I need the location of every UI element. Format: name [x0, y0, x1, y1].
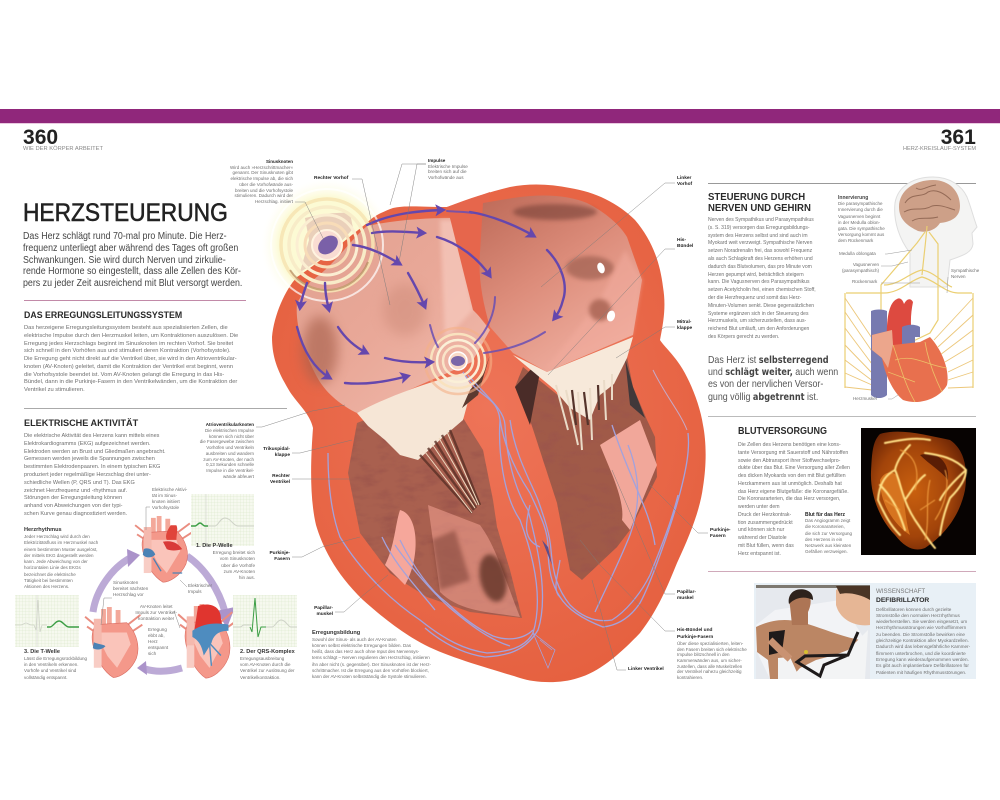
text: Blut für das Herz: Das Angiogramm zeigt: [805, 518, 850, 523]
text: His-Bündel und Purkinje-Fasern: den Fasern breiten sich elektrische: [677, 647, 747, 652]
label: Linker Vorhof: [677, 176, 692, 187]
body text: Herzmuskels, um sicherzustellen, dass aus-: [708, 318, 806, 324]
heart: QRS: [178, 604, 234, 678]
AV node: [451, 356, 465, 366]
text: T-Welle: Vorhöfe und Ventrikel sind: [24, 668, 76, 673]
label: Rechter Ventrikel: Ventrikel: [270, 480, 290, 485]
pull quote: und schlägt weiter, auch wenn: [708, 367, 838, 378]
text: Herzrhythmus: [24, 527, 98, 589]
body text: tante Versorgung mit Sauerstoff und Nährstoffen: [738, 450, 848, 456]
body text: schen Kurve genau diagnostiziert werden.: [24, 511, 127, 517]
heading: STEUERUNG DURCH: [708, 192, 805, 203]
body text: tion zusammengedrückt: [738, 520, 793, 526]
intro text: frequenz unterliegt aber während des Tages oft großen: [23, 243, 238, 254]
EKG 2: QRS complex: [233, 595, 297, 647]
body text: während der Diastole: [738, 535, 787, 541]
body text: [708, 217, 816, 340]
text: His-Bündel und Purkinje-Fasern: His-Bündel und: [677, 628, 712, 633]
text: Blut für das Herz: Netzwerk aus kleinsten: [805, 543, 851, 548]
text: Blut für das Herz: [805, 512, 852, 555]
pull quote: gung völlig abgetrennt ist.: [708, 392, 818, 403]
annotation: Elektrische Aktivität: Elektrische Aktivi-: [152, 487, 187, 492]
label: Sinusknoten: [230, 159, 293, 204]
text: Blut für das Herz: Gefäßen verzweigen.: [805, 549, 848, 554]
label: Medulla oblongata: Medulla oblongata: [839, 251, 876, 256]
label: Sinusknoten: über die Vorhofwände aus-: [239, 182, 293, 187]
label: Wissenschaft: WISSENSCHAFT: [876, 588, 925, 595]
text: Innervierung: dem Rückenmark: [838, 238, 873, 243]
body text: als auch Schlagkraft des Herzens erhöhen und: [708, 256, 813, 262]
label: Purkinje-Fasern right: Purkinje-: [710, 528, 731, 533]
head silhouette: [895, 177, 977, 287]
SA node: [314, 232, 342, 258]
text: T-Welle: Lässt die Erregungsrückbildung: [24, 656, 87, 661]
body text: und können sich nur: [738, 527, 784, 533]
body text: wiederherstellen. Sie werden eingesetzt, um: [876, 619, 967, 624]
body text: sich schnell in den Vorhöfen aus und stimuliert deren Kontraktion (Vorhofsystole).: [24, 348, 231, 354]
text: Blut für das Herz: die sich zur Versorgung: [805, 531, 852, 536]
body text: Herzkammern aus ist unmöglich. Deshalb hat: [738, 481, 842, 487]
section: Steuerung durch Nerven und Gehirn: [708, 192, 816, 340]
body text: reichend Blut umläuft, um den Anforderungen: [708, 326, 809, 332]
leaders: [881, 250, 948, 399]
annotation: Elektrischer Impuls: Impuls: [188, 589, 202, 594]
cycle diagram: [15, 494, 297, 678]
body text: Es gibt auch implantierbare Defibrillatoren für: [876, 663, 969, 668]
pull quote: es von der nervlichen Versor-: [708, 379, 823, 390]
left ventricle cavity: [515, 357, 657, 580]
label: Atrioventrikularknoten: 0,13 Sekunden schnelle: [206, 462, 254, 467]
body text: flimmern unterbrochen, und die koordinierte: [876, 651, 966, 656]
page number left: 360: [23, 125, 58, 149]
label: Sinusknoten: stimulieren. Dadurch wird der: [234, 193, 293, 198]
body text: zeichnet Herzfrequenz und -rhythmus auf.: [24, 488, 127, 494]
heading: [708, 192, 811, 214]
body text: mit Blut füllen, wenn das: [738, 543, 794, 549]
body text: des dicken Myokards von den mit Blut gefüllten: [738, 473, 846, 479]
text: Erregungsbildung: kann der AV-Knoten selbstständig die Systole stimulieren.: [312, 674, 427, 679]
annotation: AV-Knoten: AV-Knoten leitet: [140, 604, 172, 609]
text: Innervierung: Die parasympathische: [838, 201, 883, 206]
label: Mitralklappe: klappe: [677, 326, 692, 331]
body text: Nerven des Sympathikus und Parasympathikus: [708, 217, 814, 223]
label: Sinusknoten: Wird auch »Herzschrittmacher«: [230, 165, 293, 170]
heading: NERVEN UND GEHIRN: [708, 203, 811, 214]
text: Innervierung: in der Medulla oblon-: [838, 220, 880, 225]
label: His-Bündel: His-: [677, 238, 686, 243]
annotation: Elektrische Aktivität: knoten initiiert: [152, 499, 180, 504]
label: Impulse: Vorhofwände aus: [428, 175, 464, 180]
label: Trikuspidalklappe: Trikuspidal-: [263, 447, 290, 452]
page number right: [903, 125, 976, 152]
label: Purkinje-Fasern left: Purkinje-: [269, 551, 290, 556]
page number left: WIE DER KÖRPER ARBEITET: [23, 146, 103, 152]
text: Innervierung: gata. Die sympathische: [838, 226, 885, 231]
text: His-Bündel und Purkinje-Fasern: zustellen, dass alle Muskelzellen: [677, 664, 742, 669]
body text: Erregung kann wiederaufgenommen werden.: [876, 657, 969, 662]
text: QRS: Ventrikel zur Auslösung der: [240, 668, 295, 673]
body text: Defibrillatoren können durch gezielte: [876, 606, 951, 612]
body text: schiedliche Wellen (P, QRS und T). Das EKG: [24, 480, 135, 486]
text: T-Welle: vollständig entspannt.: [24, 675, 68, 680]
label: Rechter Ventrikel: [270, 474, 290, 485]
impulse arrows: [297, 210, 565, 384]
body text: Herzen gepumpt wird, beträchtlich steigern: [708, 272, 804, 278]
label: Linker Vorhof: Vorhof: [677, 182, 692, 187]
annotation: Sinusknoten: bereitet nächsten: [113, 586, 148, 591]
text: P-Welle: [213, 550, 255, 580]
text: Innervierung: Innervierung: [838, 195, 868, 201]
pull quote: [708, 355, 838, 403]
heading: Defibrillator: DEFIBRILLATOR: [876, 597, 929, 604]
text: His-Bündel und Purkinje-Fasern: [677, 628, 747, 680]
text: QRS: Ventrikelkontraktion.: [240, 675, 281, 680]
body text: zu beenden. Die Stromstöße bewirken eine: [876, 632, 965, 637]
annotation: AV-Knoten: Impuls zur Ventrikel-: [135, 610, 177, 615]
text: Herzrhythmus: der mittels EKG dargestellt werden: [24, 553, 94, 558]
right ventricle cavity: [348, 408, 522, 618]
text: Blut für das Herz: die Koronararterien,: [805, 524, 845, 529]
body text: Ventrikel zu stimulieren.: [24, 387, 85, 393]
label: Papillarmuskel right: [677, 590, 696, 601]
body text: elektrische Impulse durch den Herzmuskel leiten, um Kontraktionen auszulösen. Die: [24, 333, 238, 339]
body text: Systeme ergänzen sich in der Steuerung des: [708, 311, 808, 317]
main title: HERZSTEUERUNG: [23, 199, 228, 227]
label: Atrioventrikularknoten: die Fasergewebe zwischen: [200, 439, 254, 444]
nerves: [845, 226, 973, 388]
text: Herzrhythmus: Elektrizitätsfluss im Herzmuskel nach: [24, 540, 98, 545]
text: T-Welle: [24, 656, 87, 680]
EKG 3: T wave: [15, 595, 79, 647]
text: Erregungsbildung: heißt, dass das Herz auch ohne Input des Nervensys-: [312, 649, 419, 654]
text: Erregungsbildung: ihn aber nicht (s. gegenüber). Der Sinusknoten ist der Herz-: [312, 662, 431, 667]
text: Herzrhythmus: horizontalen Linie des EKGs: [24, 565, 81, 570]
text: Erregungsbildung: Erregungsbildung: [312, 630, 360, 636]
SA node rings: [271, 189, 383, 301]
label: Purkinje-Fasern left: [269, 550, 290, 562]
body text: Elektrokardiogramms (EKG) aufgezeichnet werden.: [24, 441, 150, 447]
annotation: Sinusknoten: Sinusknoten: [113, 580, 138, 585]
heart: T wave: [85, 607, 142, 678]
tricuspid valve: [357, 355, 490, 513]
annotation: Erregung ebbt: sich: [148, 651, 156, 656]
body text: Patienten mit häufigen Rhythmusstörungen.: [876, 670, 966, 675]
label: Papillarmuskel left: [314, 606, 333, 617]
label: Rechter Ventrikel: Rechter: [272, 474, 290, 479]
body text: dadurch das Blutvolumen, das pro Minute vom: [708, 264, 812, 270]
annotation: Erregung ebbt: ebbt ab,: [148, 633, 165, 638]
body text: Die Erregung geht nicht direkt auf die Ventrikel über, sie wird in den Atrioventrikular-: [24, 356, 237, 362]
label: Linker Vorhof: Linker: [677, 176, 691, 181]
label: Papillarmuskel left: Papillar-: [314, 606, 333, 611]
intro text: [23, 231, 242, 289]
aortic wall between atria: [447, 192, 490, 327]
annotation: Elektrischer Impuls: Elektrischer: [188, 583, 212, 588]
label: Vagusnerven: (parasympathisch): [842, 268, 879, 273]
body text: (s. S. 319) versorgen das Erregungsbildungs-: [708, 225, 810, 231]
annotation: Erregung ebbt: entspannt: [148, 645, 168, 650]
section: Erregungsleitungssystem: [24, 310, 238, 393]
page number right: HERZ-KREISLAUF-SYSTEM: [903, 146, 976, 152]
page number right: 361: [941, 125, 976, 149]
label: Atrioventrikularknoten: Impulse in die Ventrikel-: [206, 468, 254, 473]
heading: BLUTVERSORGUNG: [738, 426, 827, 437]
text: Innervierung: Vagusnerven beginnt: [838, 214, 880, 219]
panel: Defibrillator: [754, 583, 976, 679]
text: QRS: vom AV-Knoten durch die: [240, 662, 290, 667]
label: Mitralklappe: [677, 320, 692, 331]
label: Sinusknoten: genannt. Der Sinusknoten gibt: [232, 170, 293, 175]
body text: des Körpers gerecht zu werden.: [708, 334, 779, 340]
annotation: Sinusknoten: Herzschlag vor: [113, 592, 144, 597]
intro text: pers zu jeder Zeit ausreichend mit Blut versorgt werden.: [23, 278, 242, 289]
intro text: rende Hormone so eingestellt, dass alle Zellen des Kör-: [23, 266, 241, 277]
section: Elektrische Aktivität: [24, 418, 166, 517]
label: Sympathische Nerven: Nerven: [951, 274, 966, 279]
intro text: Das Herz schlägt rund 70-mal pro Minute. Die Herz-: [23, 231, 227, 242]
label: Vagusnerven: [842, 262, 879, 273]
label: Atrioventrikularknoten: wände abfeuert: [223, 474, 254, 479]
heart wall: [272, 184, 706, 682]
label: Purkinje-Fasern right: [710, 528, 731, 539]
body text: der die Herzfrequenz und somit das Herz-: [708, 295, 801, 301]
EKG 1: P wave: [191, 494, 254, 546]
label: Atrioventrikularknoten: ausbreiten und wandern: [206, 451, 254, 456]
label: Mitralklappe: Mitral-: [677, 320, 691, 325]
body text: Gemessen werden jeweils die Spannungen zwischen: [24, 456, 155, 462]
body text: Die Zellen des Herzens benötigen eine kons-: [738, 442, 841, 448]
label: Papillarmuskel right: muskel: [677, 596, 694, 601]
cycle arrows: [93, 556, 225, 671]
text: Blut für das Herz: Blut für das Herz: [805, 512, 845, 518]
main heart illustration: [268, 184, 706, 682]
body text: produziert jeder regelmäßige Herzschlag drei unter-: [24, 472, 151, 478]
header bar: [0, 109, 1000, 124]
text: His-Bündel und Purkinje-Fasern: Impulse blitzschnell in den: [677, 652, 730, 657]
body text: Erregung jedes Herzschlags beginnt im Sinusknoten im rechten Vorhof. Sie breitet: [24, 340, 233, 346]
text: Herzrhythmus: Tätigkeit bei bestimmten: [24, 578, 73, 583]
right atrium flap: [300, 213, 353, 272]
label: Rechter Vorhof: Rechter Vorhof: [314, 176, 348, 181]
section: Blutversorgung: [738, 426, 858, 556]
leader lines: [101, 507, 187, 628]
text: Erregungsbildung: tems schlägt – Nerven regulieren den Herzschlag, initiieren: [312, 655, 430, 660]
body text: [738, 442, 850, 558]
body text: werden unter dem: [738, 504, 779, 510]
body text: setzen Acetylcholin frei, einen chemischen Stoff,: [708, 287, 816, 293]
body text: bestimmten Elektrodenpaaren. In einem typischen EKG: [24, 464, 160, 470]
label: Sympathische Nerven: [951, 268, 979, 280]
text: His-Bündel und Purkinje-Fasern: Kammerwänden aus, um sicher-: [677, 658, 742, 663]
body text: Störungen der Erregungsleitung können: [24, 495, 122, 501]
annotation: Erregung ebbt: [148, 627, 168, 656]
body text: kann. Die Vagusnerven des Parasympathikus: [708, 279, 809, 285]
text: Innervierung: Versorgung kommt aus: [838, 232, 884, 237]
annotation: Sinusknoten: [113, 580, 148, 597]
label: Sinusknoten: Herzschlag. initiiert: [255, 199, 293, 204]
text: Innervierung: Innervierung durch die: [838, 207, 883, 212]
text: QRS: [240, 656, 295, 680]
pull quote: Das Herz ist selbsterregend: [708, 355, 829, 366]
brain: [899, 180, 960, 232]
label: Papillarmuskel right: Papillar-: [677, 590, 696, 595]
left atrium chamber: [479, 196, 642, 372]
text: Herzrhythmus: kann. Jede Abweichung von der: [24, 559, 88, 564]
AV node rings: [425, 328, 491, 394]
body text: system des Herzens selbst und sind auch im: [708, 233, 808, 239]
body text: Herz entspannt ist.: [738, 550, 781, 556]
label: Herzmuskel: Herzmuskel: [853, 396, 877, 401]
body text: [876, 606, 970, 676]
text: P-Welle: hin aus.: [239, 575, 255, 580]
text: His-Bündel und Purkinje-Fasern: Purkinje-Fasern: [677, 635, 713, 640]
body text: setzen Noradrenalin frei, das sowohl Frequenz: [708, 248, 812, 254]
annotation: Elektrische Aktivität: [152, 487, 188, 510]
body text: dukte über das Blut. Eine Versorgung aller Zellen: [738, 465, 850, 471]
label: Atrioventrikularknoten: können sich nicht über: [209, 434, 254, 438]
body text: Herzrhythmusstörungen wie Vorhofflimmern: [876, 625, 966, 630]
small heart: [871, 298, 948, 402]
label: Purkinje-Fasern left: Fasern: [274, 557, 290, 562]
body text: Druck der Herzkontrak-: [738, 512, 791, 518]
text: Herzrhythmus: bezeichnet die elektrische: [24, 572, 76, 577]
text: Erregungsbildung: Sowohl der Sinus- als auch der AV-Knoten: [312, 636, 396, 642]
annotation: AV-Knoten: kontraktion weiter: [138, 616, 174, 621]
label: Sinusknoten: elektrische Impulse ab, die sich: [230, 176, 293, 181]
text: P-Welle: über die Vorhöfe: [221, 563, 255, 568]
label: QRS: 2. Der QRS-Komplex: [240, 649, 295, 655]
text: P-Welle: zum AV-Knoten: [224, 569, 255, 574]
label: T-Welle: 3. Die T-Welle: [24, 649, 60, 655]
label: Impulse: breiten sich auf die: [428, 169, 467, 174]
label: Rückenmark: Rückenmark: [852, 279, 877, 284]
text: Herzrhythmus: Jeder Herzschlag wird durch den: [24, 534, 90, 539]
body text: Dadurch wird das lebensgefährliche Kammer-: [876, 644, 970, 649]
label: P-Welle: 1. Die P-Welle: [196, 543, 233, 549]
label: Impulse: [428, 158, 468, 180]
label: Atrioventrikularknoten: Atrioventrikularknoten: [206, 422, 254, 427]
SA node glow: [261, 179, 393, 311]
body text: Die elektrische Aktivität des Herzens kann mittels eines: [24, 433, 159, 439]
annotation: Erregung ebbt: Erregung: [148, 627, 167, 632]
purkinje fibres: [328, 370, 689, 668]
body text: Myokard weit verzweigt. Sympathische Nerven: [708, 240, 812, 246]
heading: DAS ERREGUNGSLEITUNGSSYSTEM: [24, 310, 182, 321]
annotation: Elektrische Aktivität: Vorhofsystole: [152, 505, 179, 510]
mitral valve: [513, 337, 633, 450]
text: Erregungsbildung: [312, 630, 431, 679]
label: Sympathische Nerven: Sympathische: [951, 268, 979, 273]
label: Vagusnerven: Vagusnerven: [853, 262, 879, 267]
text: QRS: Erregungsausbreitung: [240, 656, 284, 661]
body text: gleichzeitige Kontraktion aller Myokardzellen.: [876, 638, 969, 643]
text: Herzrhythmus: einem bestimmten Muster ausgelöst,: [24, 547, 98, 552]
body text: das Herz eigene Blutgefäße: die Koronargefäße.: [738, 488, 849, 494]
body text: Minuten-Volumen senkt. Diese gegensätzlichen: [708, 303, 814, 309]
body text: Das herzeigene Erregungsleitungssystem besteht aus spezialisierten Zellen, die: [24, 325, 228, 331]
label: Impulse: Elektrische Impulse: [428, 164, 468, 169]
label: Purkinje-Fasern right: Fasern: [710, 534, 726, 539]
label: Atrioventrikularknoten: Die elektrischen Impulse: [205, 428, 254, 433]
intro text: Schwankungen. Sie wird durch Nerven und zirkulie-: [23, 254, 226, 266]
body text: Stromstöße den normalen Herzrhythmus: [876, 613, 960, 618]
text: Herzrhythmus: Herzrhythmus: [24, 527, 62, 533]
label: Linker Ventrikel: Linker Ventrikel: [628, 667, 664, 672]
photo: defibrillation: [756, 585, 870, 679]
annotation: Erregung ebbt: Herz: [148, 639, 158, 644]
cycle annotations: [24, 487, 295, 680]
body text: Die Koronararterien, die das Herz versorgen,: [738, 496, 840, 502]
heading: ELEKTRISCHE AKTIVITÄT: [24, 418, 138, 429]
innervation diagram: [844, 176, 978, 402]
body text: Elektroden werden an Brust und Gliedmaßen angebracht.: [24, 449, 166, 455]
label: Trikuspidalklappe: [263, 446, 290, 458]
annotation: Elektrische Aktivität: tät im Sinus-: [152, 493, 177, 498]
text: His-Bündel und Purkinje-Fasern: Über diese spezialisierten, leiten-: [677, 641, 743, 646]
text: Herzrhythmus: Aktionen des Herzens.: [24, 584, 69, 589]
label: Atrioventrikularknoten: Vorhöfen und Ventrikeln: [206, 445, 254, 450]
text: T-Welle: in den Ventrikeln erkennen.: [24, 662, 79, 667]
label: Papillarmuskel left: muskel: [316, 612, 333, 617]
label: Impulse: Impulse: [428, 158, 445, 163]
text: P-Welle: vom Sinusknoten: [220, 556, 255, 561]
text: Innervierung: [838, 195, 885, 243]
text: P-Welle: Erregung breitet sich: [213, 550, 255, 555]
text: Blut für das Herz: des Herzens in ein: [805, 537, 842, 542]
label: His-Bündel: [677, 238, 693, 249]
page number left: [23, 125, 103, 152]
body text: Bündel, dann in die Purkinje-Fasern in den Ventrikelwänden, um die Kontraktion der: [24, 379, 237, 385]
heart: Vorhofsystole: [135, 516, 192, 582]
text: Erregungsbildung: können selbst elektrische Erregungen bilden. Das: [312, 643, 411, 648]
body text: knoten (AV-Knoten) geleitet, damit die Kontraktion der Ventrikel erst beginnt, wenn: [24, 364, 233, 370]
body text: [24, 325, 238, 393]
body text: die Vorhofsystole beendet ist. Vom AV-Knoten gelangt die Erregung in das His-: [24, 372, 224, 378]
text: His-Bündel und Purkinje-Fasern: der Ventrikel nahezu gleichzeitig: [677, 669, 742, 674]
annotation: AV-Knoten: [135, 604, 177, 621]
label: Sinusknoten: breiten und die Vorhofsystole: [235, 188, 293, 193]
text: His-Bündel und Purkinje-Fasern: kontrahieren.: [677, 675, 703, 680]
angiogram image: [861, 428, 976, 555]
label: Trikuspidalklappe: klappe: [275, 453, 290, 458]
body text: [24, 433, 166, 517]
label: Atrioventrikularknoten: [200, 422, 254, 479]
label: Atrioventrikularknoten: zum AV-Knoten, der nach: [203, 456, 254, 462]
body text: sowie den Abtransport ihrer Stoffwechselpro-: [738, 458, 840, 464]
right atrium chamber: [297, 218, 490, 413]
label: His-Bündel: Bündel: [677, 244, 693, 249]
text: Erregungsbildung: schrittmacher. Ist die Erregung aus den Vorhöfen blockiert,: [312, 668, 429, 673]
label: Sinusknoten: Sinusknoten: [266, 159, 293, 164]
annotation: Elektrischer Impuls: [188, 583, 212, 594]
body text: anhand von Abweichungen von der typi-: [24, 503, 123, 509]
